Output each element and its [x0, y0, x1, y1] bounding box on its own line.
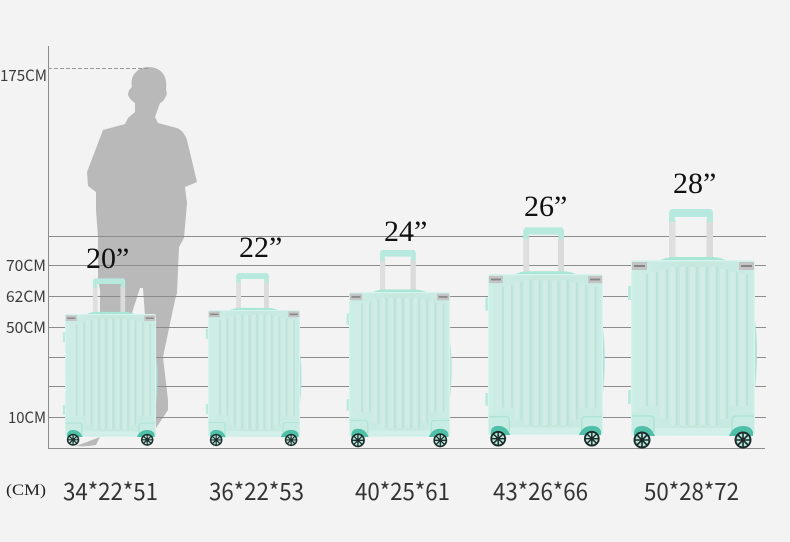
- size labels: 22”: [239, 231, 282, 264]
- dimensions row: 36*22*53: [209, 473, 304, 507]
- dimensions row: 43*26*66: [493, 473, 588, 507]
- dimensions row: (CM): [6, 482, 46, 499]
- size labels: 24”: [384, 215, 427, 248]
- size labels: 20”: [86, 242, 129, 275]
- suitcase 26 inch: [485, 227, 605, 446]
- size labels: 26”: [524, 190, 567, 223]
- suitcase 24 inch: [347, 250, 452, 447]
- dimensions row: 50*28*72: [644, 473, 739, 507]
- suitcase 20 inch: [63, 278, 157, 446]
- height marker: [48, 68, 150, 70]
- suitcase 28 inch: [628, 209, 757, 448]
- axis labels: 50CM: [6, 316, 46, 338]
- gap between the legs: [131, 288, 145, 316]
- dimensions row: [6, 473, 739, 507]
- suitcase 22 inch: [206, 273, 301, 446]
- axis labels: 70CM: [6, 254, 46, 276]
- person silhouette: [76, 67, 197, 446]
- dimensions row: 34*22*51: [63, 473, 158, 507]
- axis labels: 62CM: [6, 285, 46, 307]
- axis labels: 10CM: [8, 406, 46, 428]
- vertical axis: [48, 46, 50, 449]
- axis labels: 175CM: [0, 64, 47, 86]
- grid lines: [48, 236, 766, 448]
- axis labels: [0, 64, 47, 428]
- size labels: 28”: [673, 167, 716, 200]
- size labels: [86, 167, 716, 275]
- dimensions row: 40*25*61: [355, 473, 450, 507]
